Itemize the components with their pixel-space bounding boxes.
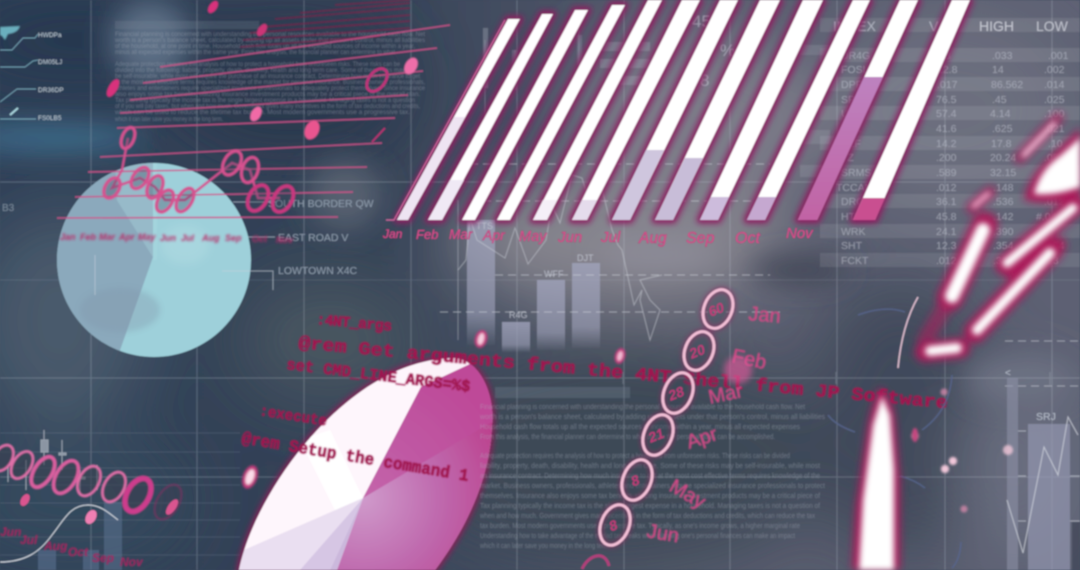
month rings scale: 20 — [686, 341, 708, 362]
dashed guide lines — [440, 164, 1080, 386]
month rings scale: Apr — [684, 423, 720, 454]
data table top right: SPY — [841, 94, 862, 106]
chart bottom right — [1005, 368, 1080, 570]
paragraph text top — [114, 21, 425, 123]
data table top right: FCKT — [841, 255, 869, 267]
ticker legend top left: DM05LJ — [38, 59, 62, 66]
data table top right: .33 — [993, 255, 1008, 267]
data table top right: 86.562 — [991, 79, 1023, 91]
data table top right: .390 — [993, 226, 1014, 238]
bar month labels: Apr — [482, 227, 506, 243]
console code text — [240, 312, 949, 487]
data table top right: HIGH — [979, 18, 1014, 34]
small month labels: Feb — [80, 232, 97, 242]
data table top right: V — [929, 18, 939, 34]
pie chart: teal — [56, 162, 252, 358]
small rings bottom left: Aug — [43, 539, 68, 553]
paragraph text top: be self-insurable, while most will require the purchase of an insurance contract. Determining how much insurance to get — [115, 73, 420, 80]
data table top right: .001 — [1048, 50, 1069, 62]
small rings bottom left: Jun — [0, 525, 21, 539]
month rings scale: Mar — [706, 380, 745, 409]
small month labels: Jun — [160, 233, 177, 243]
paragraph text bottom center: Financial planning is concerned with understanding the personal resources available to the household cash flow. Net — [480, 404, 805, 411]
ticker legend top left — [0, 26, 64, 214]
data table top right: 24.1 — [936, 226, 957, 238]
slice: grey-blue left — [56, 172, 153, 351]
paragraph text top: which can be used to reduce the lifetime tax burden. Most modern governments use a progressive tax. — [114, 109, 410, 116]
location labels: SOUTH BORDER QW — [268, 198, 374, 210]
paragraph text top: of the household, at one point in time. Household cash flow totals up all the expected sources of income within a year, — [115, 43, 415, 50]
ring and tick marker — [363, 65, 391, 95]
data table top right: UX — [841, 108, 856, 120]
data table top right: .014 — [1044, 79, 1065, 91]
data table top right: DR4G — [841, 50, 870, 62]
background bar chart with ticker labels — [458, 28, 622, 352]
console code text: :4NT_args — [316, 312, 393, 336]
bar glow — [397, 1, 970, 220]
data table top right: NLF — [841, 138, 861, 150]
small month labels: Aug — [201, 233, 220, 243]
small month labels: Apr — [118, 232, 135, 242]
dashboard stats behind bars — [600, 12, 830, 177]
data table top right: .625 — [992, 123, 1013, 135]
dashboard stats behind bars: 8 — [700, 71, 709, 90]
background bar chart with ticker labels: DJT — [577, 253, 594, 263]
paragraph text bottom center: worth is a person's balance sheet, calculated by adding up all assets under that person's control, minus all liabilities — [479, 414, 825, 421]
data table top right: 41.6 — [936, 123, 957, 135]
paragraph text bottom center: Understanding how to take advantage of the myriad tax breaks when planning one's personal finances can make an impact — [480, 533, 795, 540]
paragraph text bottom center: Household cash flow totals up all the expected sources of income within a year, minus all expected expenses — [480, 424, 800, 431]
bar month labels: Jun — [557, 229, 582, 246]
data table top right: 12.3 — [936, 240, 957, 252]
data table top right: .154 — [1044, 240, 1065, 252]
console code text: @rem Setup the command 1 — [240, 430, 470, 487]
paragraph text top: of if you will pay taxes, but when and how much. Government gives many incentives in the form of tax deductions and credits, — [115, 103, 420, 110]
month rings scale: Jan — [748, 303, 782, 328]
paragraph text bottom center: themselves. Insurance also enjoys some tax benefits, utilizing insurance investment products may be a critical piece of — [480, 493, 820, 500]
data table top right: TZ — [841, 152, 854, 164]
small month labels: Nov — [276, 235, 294, 245]
data table top right: SRMS — [841, 167, 871, 179]
small month labels — [60, 232, 294, 245]
data table top right: .002 — [1044, 64, 1065, 76]
data table top right: SHT — [841, 240, 863, 252]
bar month labels: Jan — [382, 227, 403, 241]
dashboard stats behind bars: 45 — [692, 12, 711, 31]
jagged line chart — [458, 175, 662, 340]
month rings scale — [239, 285, 782, 569]
ticker legend top left: DR36DP — [38, 87, 64, 94]
data table top right: 36.1 — [936, 196, 957, 208]
bar month labels: Mar — [449, 227, 473, 242]
small month labels: Mar — [99, 232, 116, 242]
data table top right: .354 — [993, 240, 1014, 252]
data table top right: .012 — [936, 182, 957, 194]
data table top right: .021 — [1044, 123, 1065, 135]
data table top right: .200 — [936, 152, 957, 164]
background bar chart with ticker labels: WFF — [544, 269, 564, 279]
data table top right: FOSLP — [841, 64, 875, 76]
paragraph text top: athletes and entertainers require specialized insurance professionals to adequately protect themselves. Since insurance — [115, 85, 425, 92]
console code text: :execute — [258, 403, 328, 431]
month rings scale: Jun — [645, 520, 681, 548]
data table top right: #.04 — [1036, 211, 1057, 223]
background bar chart with ticker labels: R4G — [509, 310, 528, 320]
small rings bottom left: Jul — [20, 533, 38, 547]
bar month labels: Sep — [686, 230, 715, 247]
data table top right: INDEX — [833, 18, 876, 34]
small month labels: Jan — [60, 232, 76, 242]
paragraph text top: at the most cost effective terms requires knowledge of the market for personal insurance. Business owners, professionals, — [115, 79, 425, 86]
small month labels: Jul — [181, 233, 195, 243]
paragraph text bottom center: tax burden. Most modern governments use a progressive tax. Typically, as one's income grows, a higher marginal rate — [480, 523, 800, 530]
data table top right: 57.4 — [936, 108, 957, 120]
data table top right: .012 — [1044, 196, 1065, 208]
month rings scale: 28 — [665, 383, 687, 404]
paragraph text bottom center — [479, 387, 825, 550]
small rings bottom left: Oct — [68, 545, 89, 559]
bar month labels: May — [519, 229, 547, 245]
paragraph text top: Tax planning typically the income tax is the single largest expense in a household. Managing taxes is not a question — [115, 97, 415, 104]
bar outline — [386, 20, 505, 220]
flare core — [859, 124, 1080, 570]
paragraph text top: Adequate protection requires the analysis of how to protect a household from unforeseen risks. These risks can be — [115, 61, 400, 68]
small rings bottom left — [0, 430, 187, 570]
candlesticks and curve — [0, 430, 122, 570]
small rings bottom left: Nov — [120, 555, 144, 569]
data table top right: LOW — [1036, 18, 1069, 34]
data table top right: .589 — [936, 167, 957, 179]
pink droplets — [104, 0, 421, 142]
data table top right: .142 — [993, 211, 1014, 223]
paragraph text bottom center: liability, property, death, disability, health and long term care. Some of these risks may be self-insurable, while most — [480, 463, 820, 470]
paragraph text top: which it can later save you money in the long term. — [114, 116, 223, 123]
location labels: LOWTOWN X4C — [278, 265, 358, 277]
paragraph text bottom center: Adequate protection requires the analysis of how to protect a household from unforeseen risks. These risks can be divided — [480, 453, 790, 460]
paragraph text bottom center: when and how much. Government gives many incentives in the form of tax deductions and credits, which can reduce the tax — [479, 513, 815, 520]
ticker legend top left: HWDPa — [38, 32, 62, 39]
target arcs — [828, 309, 961, 568]
slice: white — [244, 362, 420, 550]
pink droplets near rings — [239, 329, 752, 491]
background bar chart with ticker labels: TTS — [476, 221, 493, 231]
paragraph text top: worth is a person's balance sheet, calculated by adding up all assets under that person's control, minus all liabilities — [114, 37, 425, 44]
location labels — [95, 198, 374, 295]
data table top right: .13 — [1044, 255, 1059, 267]
paragraph text top: minus all expected expenses within the same year. From this analysis, the financial planner can determine to what — [115, 49, 395, 56]
pie chart: pink — [230, 350, 500, 570]
paragraph text top: also enjoys some tax benefits, utilizing insurance investment products may be a critical piece of the overall plan. — [115, 91, 420, 98]
console code text: set CMD_LINE_ARGS=%$ — [285, 356, 471, 397]
bar month labels: Jul — [600, 229, 621, 246]
glowing dots — [911, 388, 1013, 512]
data table top right: .45 — [992, 94, 1007, 106]
data table top right: 32.15 — [990, 167, 1016, 179]
data table top right: .3 — [942, 50, 951, 62]
month rings scale: 60 — [706, 299, 727, 320]
data table top right: LEK — [841, 123, 861, 135]
chart bottom right: SRJ — [1036, 411, 1056, 423]
data table top right: 12.8 — [937, 64, 958, 76]
data table top right: .148 — [993, 182, 1014, 194]
data table top right: .012 — [936, 255, 957, 267]
month rings scale: 21 — [645, 425, 667, 446]
data table top right: WRK — [841, 226, 866, 238]
flare glow — [852, 118, 1080, 570]
data table top right: 14 — [992, 64, 1004, 76]
data table top right: 4.14 — [990, 108, 1011, 120]
slices: lavender fan — [235, 498, 363, 570]
bar month labels: Feb — [416, 227, 438, 242]
dashboard stats behind bars: % — [720, 41, 735, 60]
pie glow — [239, 358, 492, 570]
small month labels: May — [138, 232, 157, 242]
month rings scale: 8 — [629, 471, 642, 489]
data table top right: HTT — [841, 211, 862, 223]
data table top right: 20.24 — [990, 152, 1016, 164]
pink line chart top left — [57, 0, 450, 245]
small rings bottom left: Sep — [92, 551, 114, 565]
bar month labels: Oct — [735, 230, 760, 247]
data table top right: .017 — [937, 79, 958, 91]
paragraph text bottom center: which it can later save you money in the long term. — [479, 543, 610, 550]
red faint text lines at top — [240, 0, 410, 47]
month rings scale: 8 — [607, 516, 620, 534]
slice: darker top — [116, 163, 154, 256]
connected rings — [100, 126, 298, 216]
data table top right: TCCAN — [836, 182, 872, 194]
bars white — [397, 0, 970, 220]
ticker legend top left: B3 — [2, 203, 15, 214]
month rings scale: Feb — [730, 345, 768, 374]
location labels: EAST ROAD V — [278, 232, 348, 244]
data table top right: 76.5 — [936, 94, 957, 106]
bar month labels: Nov — [786, 225, 814, 242]
paragraph text bottom center: an insurance contract. Determining how much insurance to get at the most cost effective terms requires knowledge of the — [480, 473, 820, 480]
bar month labels: Aug — [638, 230, 667, 247]
data table top right: .10 — [1048, 138, 1063, 150]
paragraph text top: Financial planning is concerned with understanding the personal resources available to the household cash flow. Net — [115, 31, 425, 38]
glowing flares right — [852, 118, 1080, 570]
paragraph text bottom center: From this analysis, the financial planner can determine to what degree the personal goals can be accomplished. — [480, 434, 775, 441]
data table top right: .033 — [992, 50, 1013, 62]
console code text: @rem Get arguments from the 4NT Shell from JP Software — [297, 334, 949, 414]
icon: teal blob — [0, 26, 20, 40]
slanted bar chart — [382, 0, 970, 247]
data table top right: 17.8 — [991, 138, 1012, 150]
paragraph text bottom center: market. Business owners, professionals, athletes and entertainers require specialized insurance professionals to protect — [480, 483, 825, 490]
small month labels: Sep — [225, 233, 242, 243]
data table top right: .025 — [1044, 94, 1065, 106]
paragraph text top: divided into the following: liability, property, death, disability, health and long term care. Some of these risks may — [115, 67, 406, 74]
data table top right — [820, 18, 1080, 267]
paragraph text bottom center: Tax planning typically the income tax is the single largest expense in a household. Managing taxes is not a question of — [480, 503, 820, 510]
data table top right: DPF — [841, 79, 862, 91]
ticker legend top left: FS0LB5 — [38, 115, 62, 122]
data table top right: 45.8 — [936, 211, 957, 223]
data table top right: .05 — [1044, 152, 1059, 164]
chart bottom right: < — [1005, 368, 1011, 379]
data table top right: .100 — [1044, 108, 1065, 120]
bar value fills — [397, 77, 885, 220]
month rings scale: May — [666, 475, 709, 513]
data table top right: DRG — [841, 196, 864, 208]
data table top right: .536 — [993, 196, 1014, 208]
slice: magenta — [337, 350, 500, 570]
small month labels: Oct — [252, 234, 268, 244]
data table top right: 14.2 — [936, 138, 957, 150]
bar month labels — [382, 225, 814, 247]
